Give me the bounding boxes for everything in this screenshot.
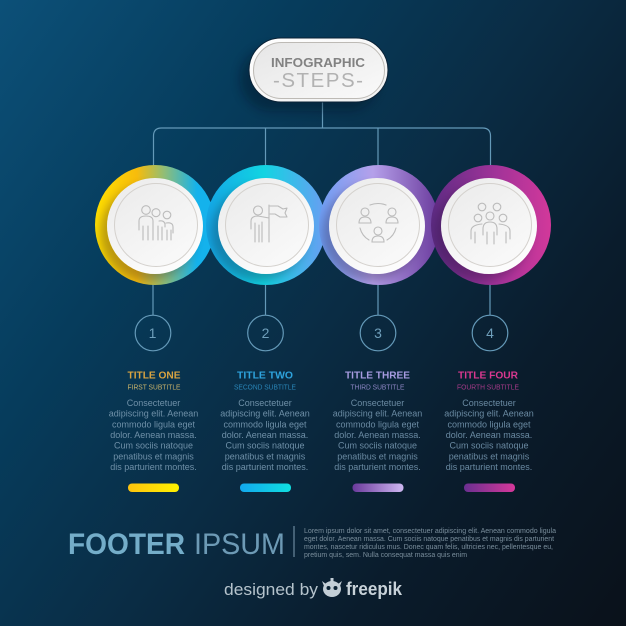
ring 3 (319, 165, 439, 285)
column 4 text: Consectetuer (462, 398, 516, 408)
column 1 text: penatibus et magnis (113, 451, 194, 461)
column 2 text: Cum sociis natoque (225, 441, 305, 451)
column 1 text: TITLE ONE (128, 370, 181, 382)
number badge 3 (360, 315, 396, 351)
column 3 text: adipiscing elit. Aenean (333, 409, 422, 419)
ring 2 (206, 165, 326, 285)
column 1 text: commodo ligula eget (112, 419, 196, 429)
bar 1 (128, 484, 179, 492)
column 3 text (333, 370, 422, 472)
column 4 text: dolor. Aenean massa. (446, 430, 532, 440)
bar 3 (352, 484, 404, 492)
icon: team of three (139, 206, 173, 240)
column 3 text: TITLE THREE (345, 370, 410, 382)
footer text: eget dolor. Aenean massa. Cum sociis natoque penatibus et magnis dis parturient (304, 536, 554, 543)
column 4 text: adipiscing elit. Aenean (444, 409, 534, 419)
icon: person with flag (251, 205, 287, 242)
number badge 2: 2 (262, 325, 270, 341)
footer divider (294, 526, 295, 557)
column 1 text (109, 370, 198, 472)
column 2 text (220, 370, 310, 472)
column 2 text: dolor. Aenean massa. (222, 430, 308, 440)
title line 1: INFOGRAPHIC (271, 55, 366, 70)
column 4 text: Cum sociis natoque (449, 441, 529, 451)
number badge 1 (135, 315, 171, 351)
title pill (240, 38, 388, 111)
column 4 text: FOURTH SUBTITLE (457, 384, 519, 392)
footer text (304, 528, 556, 559)
column 3 text: THIRD SUBTITLE (350, 384, 405, 392)
footer heading: FOOTER (68, 528, 185, 561)
title line 2: -STEPS- (273, 69, 363, 92)
column 4 text: penatibus et magnis (449, 451, 530, 461)
number badge 4: 4 (486, 325, 494, 341)
footer text: montes, nascetur ridiculus mus. Donec quam felis, ultricies nec, pellentesque eu, (304, 544, 553, 551)
column 3 text: Consectetuer (351, 398, 404, 408)
column 3 text: commodo ligula eget (336, 419, 420, 429)
credit: freepik: freepik (346, 579, 403, 599)
column 3 text: dolor. Aenean massa. (334, 430, 421, 440)
column 1 text: FIRST SUBTITLE (128, 384, 181, 392)
column 4 text: TITLE FOUR (458, 370, 519, 382)
column 2 text: Consectetuer (238, 398, 292, 408)
footer text: Lorem ipsum dolor sit amet, consectetuer adipiscing elit. Aenean commodo ligula (304, 528, 556, 535)
bar 4 (464, 484, 515, 492)
column 1 text: Cum sociis natoque (114, 441, 193, 451)
footer heading (68, 528, 285, 561)
column 1 text: adipiscing elit. Aenean (109, 409, 198, 419)
number badge 3: 3 (374, 325, 382, 341)
connector lines (153, 100, 490, 315)
column 2 text: adipiscing elit. Aenean (220, 409, 310, 419)
ring 4 (431, 165, 551, 285)
footer heading: IPSUM (194, 528, 285, 561)
icon: group of five (471, 203, 510, 244)
column 3 text: Cum sociis natoque (338, 441, 417, 451)
bar 2 (240, 484, 291, 492)
column 1 text: dis parturient montes. (110, 462, 197, 472)
column 1 text: Consectetuer (127, 398, 180, 408)
ring 1 (95, 165, 215, 285)
number badge 1: 1 (149, 325, 157, 341)
column 3 text: penatibus et magnis (337, 451, 418, 461)
credit: designed by: designed by (224, 580, 319, 599)
number badge 4 (472, 315, 508, 351)
column 1 text: dolor. Aenean massa. (110, 430, 197, 440)
number badge 2 (248, 315, 283, 351)
column 2 text: penatibus et magnis (225, 451, 306, 461)
column 2 text: commodo ligula eget (223, 419, 307, 429)
column 2 text: TITLE TWO (237, 370, 293, 382)
column 2 text: SECOND SUBTITLE (234, 384, 296, 392)
column 4 text (444, 370, 534, 472)
column 4 text: commodo ligula eget (447, 419, 531, 429)
column 2 text: dis parturient montes. (222, 462, 308, 472)
icon: freepik logo (322, 578, 342, 597)
icon: three people in a circle (359, 204, 398, 242)
column 3 text: dis parturient montes. (334, 462, 421, 472)
footer text: pretium quis, sem. Nulla consequat massa quis enim (304, 552, 467, 559)
column 4 text: dis parturient montes. (446, 462, 532, 472)
